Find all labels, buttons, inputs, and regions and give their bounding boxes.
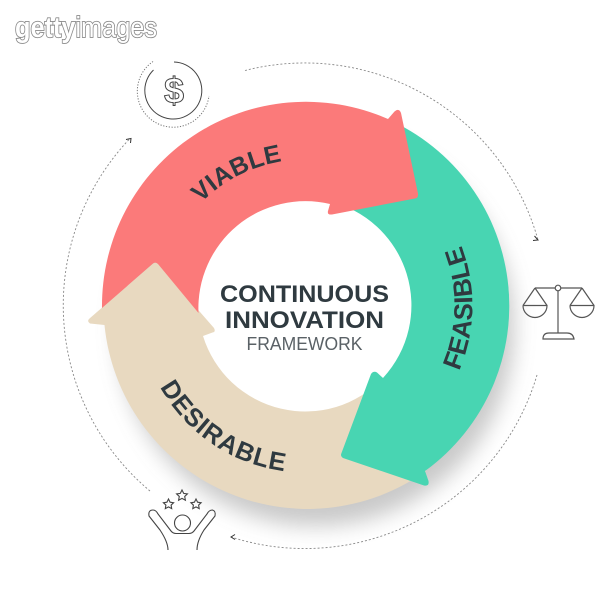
- icon: celebrating person with stars: [149, 490, 215, 550]
- label: feasible: FEASIBLE: [443, 246, 472, 370]
- arrow segment: viable: [102, 102, 418, 313]
- arrow head: upper left: [126, 138, 131, 143]
- label: viable: VIABLE: [190, 144, 282, 198]
- arrow head: bottom: [231, 534, 235, 540]
- center hole backing: [196, 196, 416, 416]
- icon: dollar coin: $: [164, 70, 184, 111]
- dotted arc: desirable to viable: [63, 138, 150, 491]
- arrow segment: feasible: [328, 116, 509, 486]
- dotted arc: viable to feasible: [245, 63, 538, 240]
- center title: FRAMEWORK: [246, 334, 362, 354]
- center title: INNOVATION: [225, 307, 384, 334]
- center title: [220, 281, 389, 354]
- dotted arc: feasible to desirable: [231, 375, 537, 549]
- arrow head: top right: [533, 236, 538, 240]
- icon: balance scale: [523, 285, 594, 339]
- drop shadow under ring: [118, 130, 514, 526]
- watermark logo: gettyimages: [15, 12, 157, 44]
- arrow segment: desirable: [88, 263, 426, 509]
- label: desirable: DESIRABLE: [160, 379, 286, 472]
- icon: dollar coin: [137, 62, 209, 127]
- center title: CONTINUOUS: [220, 281, 389, 308]
